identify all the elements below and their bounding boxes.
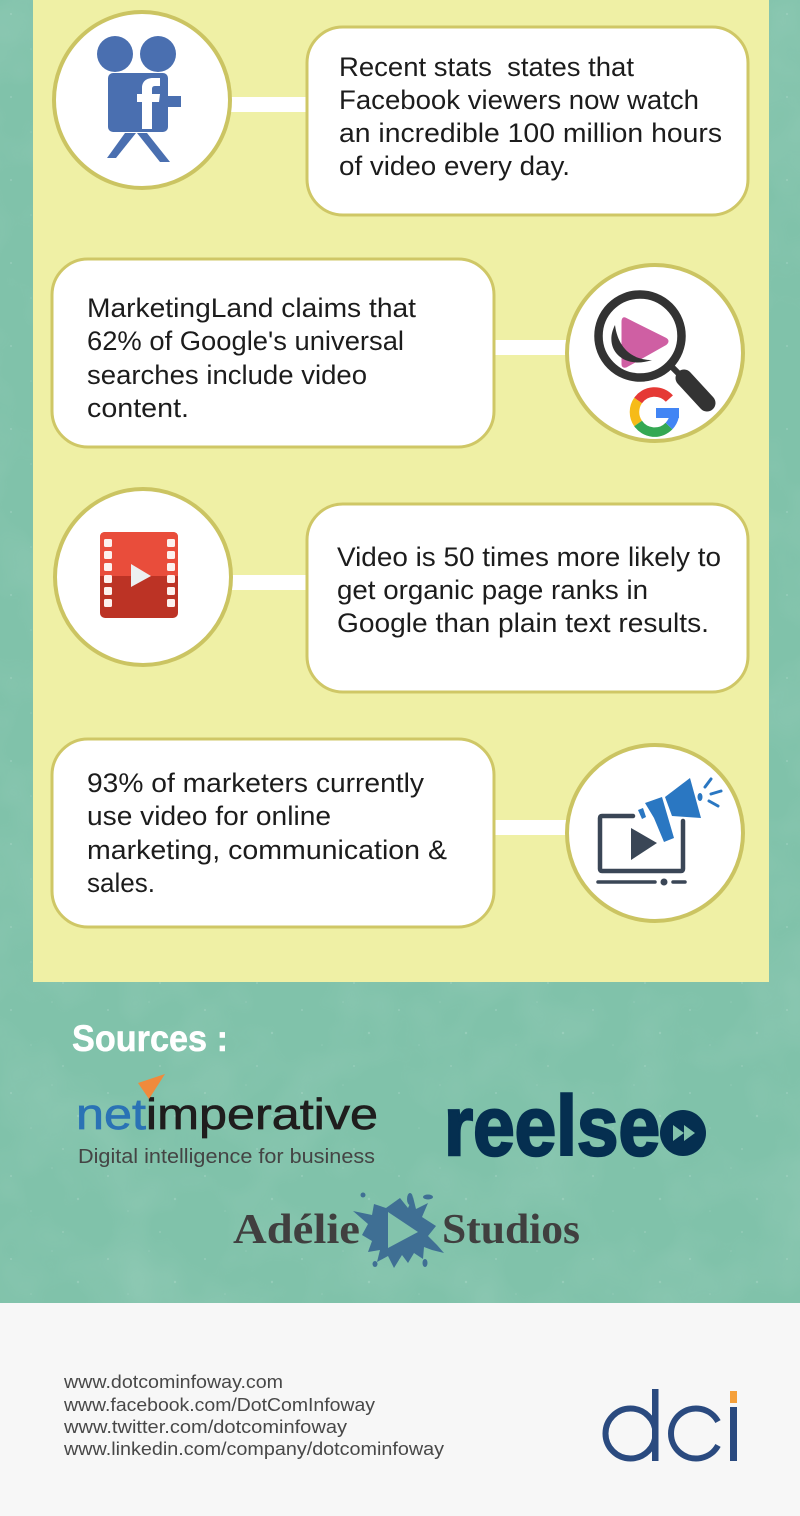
text: marketers stat — [87, 768, 447, 898]
icon: Facebook video camera — [54, 12, 230, 188]
text: Facebook stat: an incredible 100 million hours — [339, 118, 722, 148]
text: Facebook stat: of video every day. — [339, 151, 570, 181]
card: Google stat — [52, 259, 494, 447]
text: Facebook stat — [339, 52, 722, 181]
connector: row 3 — [230, 575, 308, 590]
footer band — [0, 1303, 800, 1516]
card: marketers stat — [52, 739, 494, 927]
connector: row 4 — [493, 820, 568, 835]
text: Google stat — [87, 293, 417, 423]
text: marketers stat: sales. — [87, 868, 155, 898]
text: footer links: www.linkedin.com/company/dotcominfoway — [63, 1439, 444, 1459]
text: organic rank stat: get organic page ranks in — [337, 575, 648, 605]
text: footer links: www.dotcominfoway.com — [63, 1372, 283, 1392]
text: Google stat: MarketingLand claims that — [87, 293, 417, 323]
logo: Adélie Studios: Studios — [442, 1207, 580, 1253]
card: organic rank stat — [307, 504, 748, 692]
panel: Facebook stat row — [54, 12, 748, 215]
text: marketers stat: marketing, communication & — [87, 835, 447, 865]
logo: Adélie Studios: Adélie — [233, 1207, 360, 1253]
panel: yellow stats panel — [33, 0, 769, 982]
logo: netimperative: netimperative — [76, 1090, 378, 1139]
logo: dci — [606, 1389, 737, 1461]
connector: row 1 — [230, 97, 308, 112]
text: organic rank stat: Google than plain text results. — [337, 608, 709, 638]
connector: row 2 — [493, 340, 568, 355]
panel: marketers stat row — [52, 739, 743, 927]
heading: Sources: Sources : — [72, 1018, 228, 1059]
text: marketers stat: 93% of marketers currently — [87, 768, 425, 798]
icon: magnifier with play button and Google G — [567, 265, 743, 441]
text: Google stat: content. — [87, 393, 189, 423]
logo: reelseo: reelse — [444, 1079, 660, 1173]
text: organic rank stat — [337, 542, 721, 638]
text: footer links: www.facebook.com/DotComInfoway — [63, 1395, 375, 1415]
icon: megaphone and video screen — [567, 745, 743, 921]
text: organic rank stat: Video is 50 times more likely to — [337, 542, 721, 572]
text: Facebook stat: Recent stats states that — [339, 52, 634, 82]
logo: netimperative — [76, 1074, 378, 1168]
panel: Google search stat row — [52, 259, 743, 447]
logo: Adélie Studios — [233, 1192, 580, 1268]
card: Facebook stat — [307, 27, 748, 215]
text: Google stat: 62% of Google's universal — [87, 326, 404, 356]
text: footer links — [63, 1372, 444, 1459]
text: Facebook stat: Facebook viewers now watch — [339, 85, 699, 115]
logo: netimperative: Digital intelligence for business — [78, 1146, 375, 1168]
text: footer links: www.twitter.com/dotcominfoway — [63, 1417, 347, 1437]
text: Google stat: searches include video — [87, 360, 367, 390]
panel: organic rank stat row — [55, 489, 748, 692]
text: marketers stat: use video for online — [87, 801, 331, 831]
icon: film strip with play button — [55, 489, 231, 665]
